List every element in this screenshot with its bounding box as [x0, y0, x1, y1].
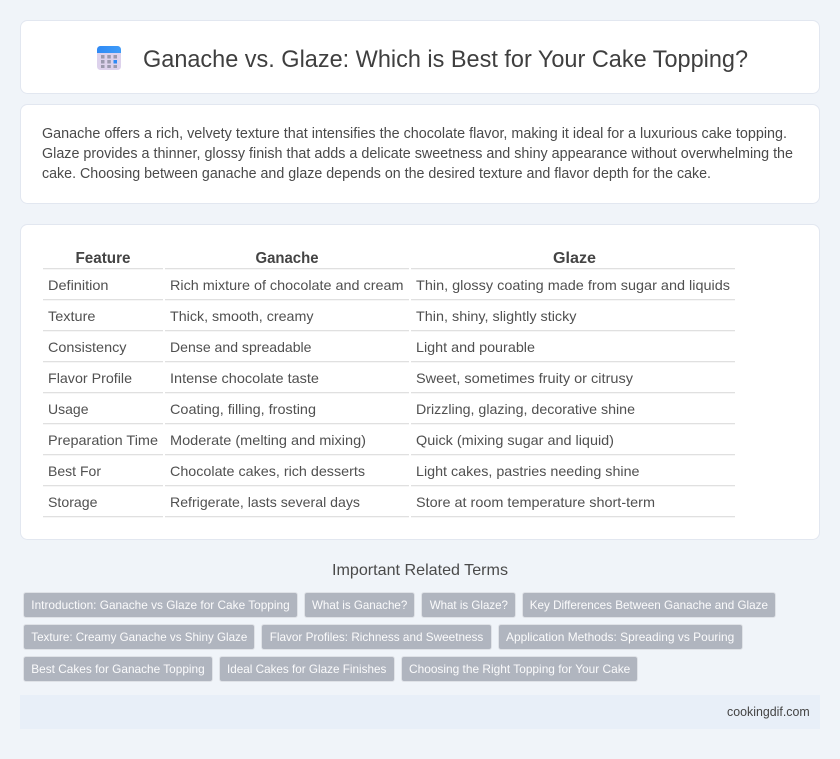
- tag: introduction: Introduction: Ganache vs Glaze for Cake Topping: [31, 598, 290, 612]
- intro text: [42, 126, 793, 182]
- tag: choosing the right topping: Choosing the Right Topping for Your Cake: [409, 662, 631, 676]
- tag: what is ganache: [304, 592, 414, 618]
- row: preparation time: Moderate (melting and mixing): [170, 432, 366, 448]
- tag: key differences: Key Differences Between Ganache and Glaze: [530, 598, 768, 612]
- row: texture: Texture: [48, 308, 96, 324]
- tag: ideal cakes: Ideal Cakes for Glaze Finishes: [227, 662, 386, 676]
- tag: key differences: [522, 592, 776, 618]
- row: storage: Storage: [48, 494, 98, 510]
- row: texture: Thin, shiny, slightly sticky: [416, 308, 576, 324]
- row: consistency: [48, 339, 535, 355]
- panel: introduction: [20, 104, 820, 204]
- row: usage: Usage: [48, 401, 89, 417]
- table header: Feature: [76, 250, 131, 267]
- row: definition: [48, 277, 730, 293]
- row: best for: Light cakes, pastries needing shine: [416, 463, 640, 479]
- row: consistency: Light and pourable: [416, 339, 535, 355]
- title: Ganache vs. Glaze: Which is Best for Your Cake Topping?: [143, 46, 748, 73]
- row: definition: Definition: [48, 277, 108, 293]
- row: definition: Rich mixture of chocolate and cream: [170, 277, 404, 293]
- table header: [76, 250, 596, 267]
- row: storage: Refrigerate, lasts several days: [170, 494, 360, 510]
- row: preparation time: Preparation Time: [48, 432, 158, 448]
- intro text: Ganache offers a rich, velvety texture that intensifies the chocolate flavor, making it ideal for a luxurious cake topping.: [42, 126, 787, 142]
- row: preparation time: Quick (mixing sugar and liquid): [416, 432, 614, 448]
- row: usage: Coating, filling, frosting: [170, 401, 316, 417]
- row: storage: Store at room temperature short-term: [416, 494, 655, 510]
- row: flavor profile: Flavor Profile: [48, 370, 132, 386]
- tag: ideal cakes: [220, 656, 394, 682]
- row: consistency: Consistency: [48, 339, 126, 355]
- icon: calendar: [97, 46, 121, 70]
- intro text: cake. Choosing between ganache and glaze depends on the desired texture and flavor depth for the cake.: [42, 166, 711, 182]
- table header: Glaze: [553, 250, 596, 267]
- tag: best cakes: [24, 656, 212, 682]
- table header: Ganache: [256, 250, 319, 267]
- row: storage: [48, 494, 655, 510]
- tag: what is glaze: [422, 592, 516, 618]
- footer: cookingdif.com: [727, 705, 810, 719]
- tag: flavor profiles: [262, 624, 492, 650]
- tag: application methods: [498, 624, 742, 650]
- intro text: Glaze provides a thinner, glossy finish that adds a delicate sweetness and shiny appearance without overwhelming the: [42, 146, 793, 162]
- panel: comparison table: [20, 224, 820, 540]
- tag: texture: [24, 624, 254, 650]
- tag: texture: Texture: Creamy Ganache vs Shiny Glaze: [31, 630, 248, 644]
- heading: important related terms: Important Related Terms: [332, 562, 508, 579]
- row: texture: [48, 308, 576, 324]
- tag: choosing the right topping: [402, 656, 638, 682]
- row: consistency: Dense and spreadable: [170, 339, 312, 355]
- tag: what is glaze: What is Glaze?: [430, 598, 508, 612]
- tag: best cakes: Best Cakes for Ganache Topping: [31, 662, 205, 676]
- tag: what is ganache: What is Ganache?: [312, 598, 408, 612]
- row: best for: Best For: [48, 463, 101, 479]
- row: texture: Thick, smooth, creamy: [170, 308, 314, 324]
- row: usage: Drizzling, glazing, decorative shine: [416, 401, 635, 417]
- row: flavor profile: [48, 370, 633, 386]
- row: flavor profile: Intense chocolate taste: [170, 370, 319, 386]
- header panel: [20, 20, 820, 94]
- row: best for: Chocolate cakes, rich desserts: [170, 463, 365, 479]
- tag: introduction: [24, 592, 298, 618]
- footer: [20, 695, 820, 729]
- row: definition: Thin, glossy coating made from sugar and liquids: [416, 277, 730, 293]
- tag: application methods: Application Methods: Spreading vs Pouring: [506, 630, 734, 644]
- row: best for: [48, 463, 640, 479]
- row: preparation time: [48, 432, 614, 448]
- row: flavor profile: Sweet, sometimes fruity or citrusy: [416, 370, 633, 386]
- tag: flavor profiles: Flavor Profiles: Richness and Sweetness: [270, 630, 483, 644]
- row: usage: [48, 401, 635, 417]
